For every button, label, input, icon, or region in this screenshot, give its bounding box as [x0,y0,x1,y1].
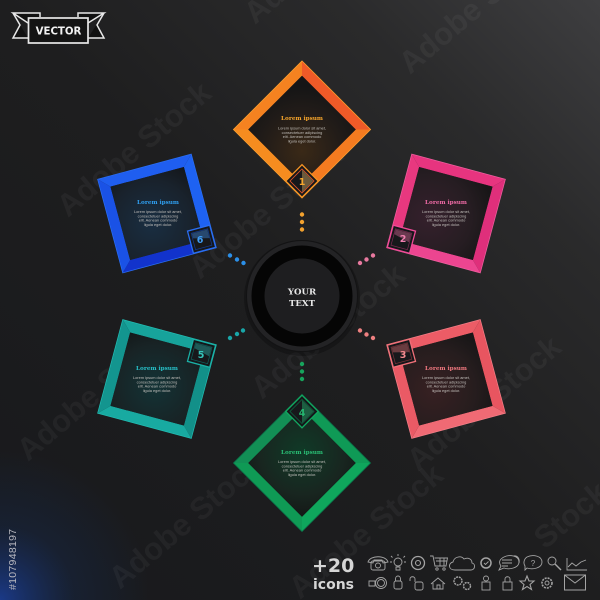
icon: at sign [412,556,424,570]
watermarks: Adobe Stock [102,446,270,595]
icon: cloud [449,557,475,570]
badge 1 [286,165,318,197]
panel 5: teal square: 5 [198,350,204,361]
panel 4: green diamond: Lorem ipsum dolor sit amet, [278,459,326,464]
vector ribbon badge [13,13,104,43]
icon: question bubble: ? [531,559,536,568]
icon: magnifier [548,557,561,570]
badge 2 [387,225,416,253]
icon: bulb [390,554,406,570]
panel 3: coral square: 3 [400,350,406,361]
panel 4: green diamond [233,394,371,532]
panel 3: coral square: Lorem ipsum dolor sit amet, [422,375,470,380]
badge 5 [187,339,216,367]
center circle: YOUR [287,288,317,298]
watermarks: Adobe Stock [50,74,218,223]
panel 2: pink square: 2 [400,234,406,245]
panel 1: orange diamond: consectetuer adipiscing [282,130,322,135]
image id: #107948197 [7,529,19,590]
panel 2: pink square [387,154,505,273]
watermarks: Adobe Stock [10,318,178,467]
icon: star [520,576,534,590]
connector dots: coral [358,328,375,340]
panel 3: coral square [387,320,505,438]
icon: envelope [564,575,586,590]
panel 2: pink square: Lorem ipsum dolor sit amet, [422,209,470,214]
icon: bag [482,576,490,590]
panel 6: blue square: Lorem ipsum [137,200,179,206]
panel 6: blue square: elit. Aenean commodo [139,218,177,223]
panel 4: green diamond: 4 [299,408,306,419]
panel 4: green diamond: Lorem ipsum [281,450,323,456]
panel 6: blue square: ligula eget dolor. [144,222,172,227]
panel 5: teal square: Lorem ipsum dolor sit amet, [133,375,181,380]
+20 icons caption [312,555,354,593]
vector ribbon badge: VECTOR [36,26,82,38]
panel 3: coral square: Lorem ipsum [425,366,467,372]
icon: cog [542,578,552,588]
badge 4 [286,395,318,428]
panel 1: orange diamond: 1 [299,177,305,188]
panel 4: green diamond: elit. Aenean commodo [283,468,321,473]
connector dots: teal [228,328,245,340]
+20 icons caption: icons [313,577,354,593]
panel 6: blue square: Lorem ipsum dolor sit amet, [134,209,182,214]
badge 6 [187,225,216,253]
panel 1: orange diamond: Lorem ipsum dolor sit amet, [278,126,326,130]
icon: padlock bag [503,577,512,590]
icon: closed lock [394,576,402,589]
panel 3: coral square: ligula eget dolor. [432,388,460,393]
icon: ring key [369,578,386,588]
panel 5: teal square: ligula eget dolor. [143,388,171,393]
connector dots: orange [300,212,304,232]
connector dots: blue [228,253,246,265]
icon: phone [368,557,388,570]
panel 3: coral square: consectetuer adipiscing [426,379,466,384]
panel 2: pink square: Lorem ipsum [425,200,467,206]
watermarks: Adobe Stock [182,136,350,285]
panel 2: pink square: elit. Aenean commodo [427,218,465,223]
panel 1: orange diamond: Lorem ipsum [281,116,323,122]
icon set [368,554,587,590]
connector dots: pink [358,253,375,265]
panel 3: coral square: elit. Aenean commodo [427,384,465,389]
panel 5: teal square [98,320,216,438]
+20 icons caption: +20 [312,555,354,577]
icon: line chart [567,558,587,570]
icon: gears [454,577,470,590]
icon: chat bubbles [499,556,519,570]
panel 4: green diamond: ligula eget dolor. [288,472,316,477]
panel 1: orange diamond: ligula eget dolor. [288,138,316,143]
watermarks: Adobe Stock [244,256,412,405]
icon: clock [481,558,491,568]
icon: house [431,578,445,589]
panel 4: green diamond: consectetuer adipiscing [282,463,322,468]
watermarks: Adobe Stock [400,328,568,477]
connector dots: green [300,362,304,381]
icon: open lock [410,577,423,590]
icon: question bubble [524,556,542,570]
center circle: TEXT [289,299,316,309]
center circle [244,240,360,356]
panel 6: blue square [98,154,216,273]
panel 5: teal square: consectetuer adipiscing [137,379,177,384]
panel 6: blue square: 6 [197,235,204,246]
panel 2: pink square: consectetuer adipiscing [426,213,466,218]
panel 5: teal square: elit. Aenean commodo [138,384,176,389]
panel 1: orange diamond: elit. Aenean commodo [283,134,321,139]
panel 2: pink square: ligula eget dolor. [432,222,460,227]
panel 1: orange diamond [233,61,371,198]
panel 6: blue square: consectetuer adipiscing [138,213,178,218]
badge 3 [387,339,416,367]
icon: cart [430,556,448,570]
panel 5: teal square: Lorem ipsum [136,366,178,372]
